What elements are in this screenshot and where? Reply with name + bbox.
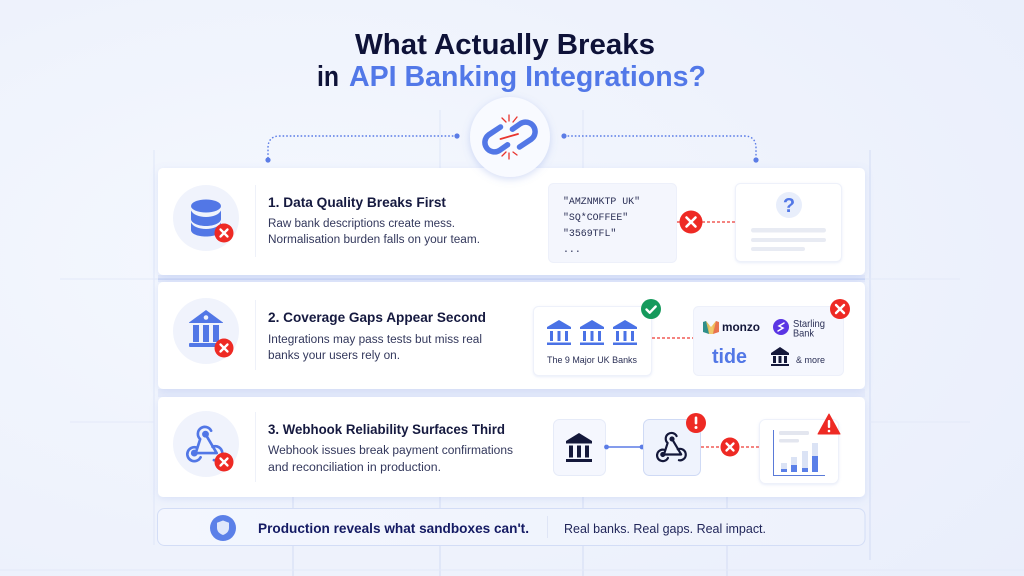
text block 3 <box>268 445 513 474</box>
text block 2 <box>268 334 482 362</box>
chart: reconciliation report with warning <box>760 414 840 484</box>
heading 1: 1. Data Quality Breaks First <box>268 195 447 210</box>
missed banks box: monzo <box>722 320 760 334</box>
missed banks box: & more <box>796 355 825 366</box>
panel: card 2 coverage gaps <box>158 282 865 389</box>
icon: shield <box>210 515 236 541</box>
arrow: broken normalisation link <box>677 210 735 234</box>
unknown result box <box>736 184 842 262</box>
missed banks box: Starling <box>793 318 825 330</box>
title <box>317 29 706 93</box>
text block 2: Integrations may pass tests but miss real <box>268 334 482 346</box>
bank node <box>554 420 606 476</box>
panel: card 3 webhook reliability <box>158 397 865 497</box>
arrow: coverage gap <box>652 337 693 339</box>
text block 3: and reconciliation in production. <box>268 462 441 474</box>
unknown result box: ? <box>783 195 795 217</box>
raw descriptions box: "AMZNMKTP UK" <box>563 196 640 207</box>
title: API Banking Integrations? <box>349 61 706 93</box>
callout: bottom banner: Production reveals what sandboxes can't. <box>258 520 529 536</box>
missed banks box: tide <box>712 346 747 368</box>
panel: card 1 data quality <box>158 168 865 275</box>
text block 1: Raw bank descriptions create mess. <box>268 218 455 230</box>
raw descriptions box <box>548 184 676 262</box>
title: What Actually Breaks <box>355 29 655 61</box>
raw descriptions box: "3569TFL" <box>563 228 616 239</box>
webhook node <box>644 413 706 476</box>
connector: right dotted <box>561 133 759 163</box>
icon: database with error <box>173 185 239 251</box>
heading 3: 3. Webhook Reliability Surfaces Third <box>268 422 505 437</box>
callout: bottom banner: Real banks. Real gaps. Real impact. <box>564 522 766 536</box>
arrow: bank to webhook <box>604 445 644 449</box>
major banks box: The 9 Major UK Banks <box>547 355 637 366</box>
connector: left dotted <box>265 133 460 163</box>
text block 2: banks your users rely on. <box>268 350 400 362</box>
title: in <box>317 61 339 93</box>
arrow: webhook failure <box>701 438 759 456</box>
raw descriptions box: ... <box>563 244 581 255</box>
text block 1: Normalisation burden falls on your team. <box>268 234 480 246</box>
icon: bank with error <box>173 298 239 364</box>
missed banks box: Bank <box>793 328 815 340</box>
major banks box <box>534 299 661 376</box>
icon: broken chain link <box>470 97 550 177</box>
heading 2: 2. Coverage Gaps Appear Second <box>268 310 486 325</box>
icon: webhook with error <box>173 411 239 477</box>
icon: other bank <box>771 347 789 366</box>
icon: monzo <box>703 321 719 334</box>
raw descriptions box: "SQ*COFFEE" <box>563 212 628 223</box>
text block 1 <box>268 218 480 246</box>
icon: starling <box>773 319 789 335</box>
text block 3: Webhook issues break payment confirmations <box>268 445 513 457</box>
missed banks box <box>694 299 850 376</box>
callout: bottom banner <box>158 508 865 546</box>
